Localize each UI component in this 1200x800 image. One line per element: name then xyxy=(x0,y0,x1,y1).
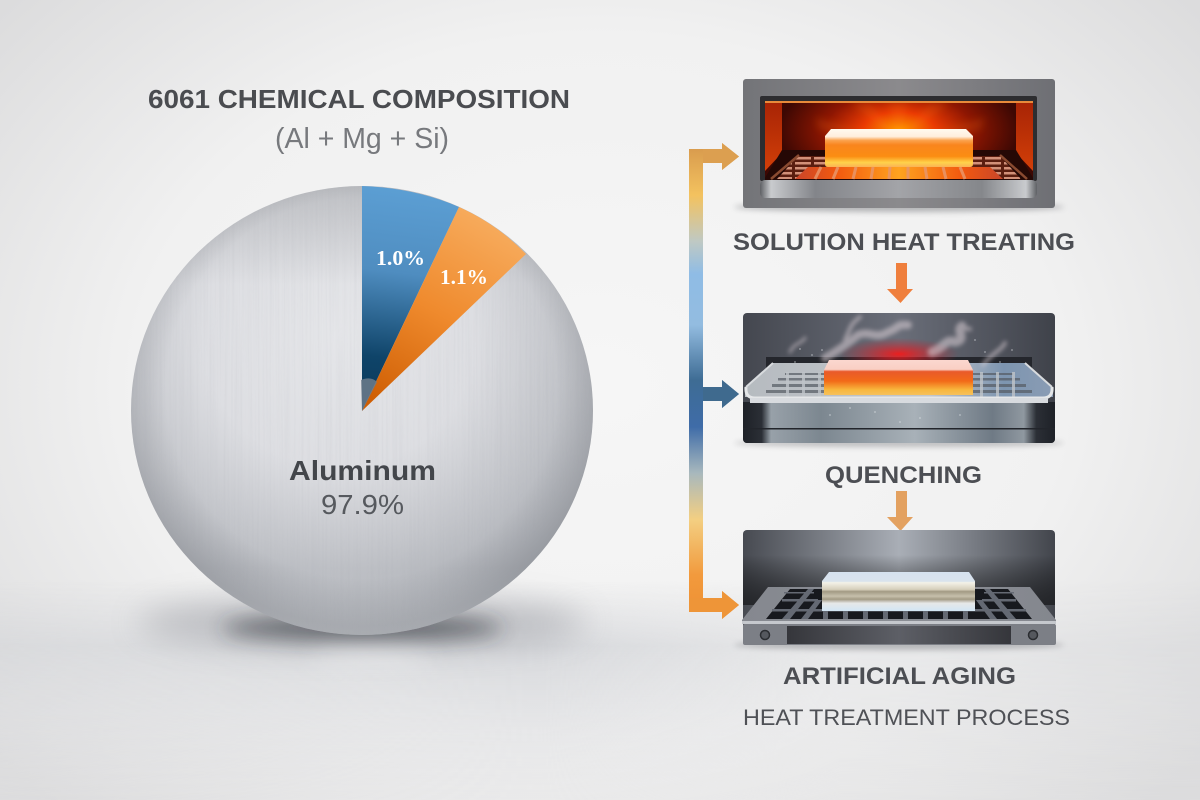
title xyxy=(148,84,570,155)
ingot: aged aluminum xyxy=(822,572,975,611)
label: solution heat treating: SOLUTION HEAT TREATING xyxy=(733,229,1075,256)
label: artificial aging: ARTIFICIAL AGING xyxy=(783,663,1016,690)
ingot: glowing xyxy=(825,129,973,167)
label: orange: 1.1% xyxy=(440,265,488,289)
process bracket arrow xyxy=(689,143,739,619)
panel: solution heat treating furnace xyxy=(734,79,1064,212)
water splash xyxy=(794,339,1013,423)
label: quenching: QUENCHING xyxy=(825,462,982,489)
steam xyxy=(790,317,1005,365)
pie floor shadow xyxy=(137,596,587,666)
furnace lip xyxy=(760,180,1037,198)
panel: artificial aging rack xyxy=(734,530,1064,650)
ingot: quenching xyxy=(824,360,973,395)
magnesium slice xyxy=(362,186,459,411)
arrow: step two to three xyxy=(887,491,913,531)
silicon slice xyxy=(362,207,526,411)
title: (Al + Mg + Si) xyxy=(275,123,449,155)
panel: quenching tray xyxy=(734,313,1064,447)
label: aluminum percent: 97.9% xyxy=(321,489,404,520)
pie center notch xyxy=(361,378,377,411)
label: aluminum: Aluminum xyxy=(289,455,436,486)
caption: heat treatment process: HEAT TREATMENT PROCESS xyxy=(743,705,1070,730)
aluminum slice xyxy=(131,186,593,635)
arrow: step one to two xyxy=(887,263,913,303)
pie chart xyxy=(131,186,593,635)
label: blue: 1.0% xyxy=(376,246,425,270)
title: 6061 CHEMICAL COMPOSITION xyxy=(148,84,570,114)
